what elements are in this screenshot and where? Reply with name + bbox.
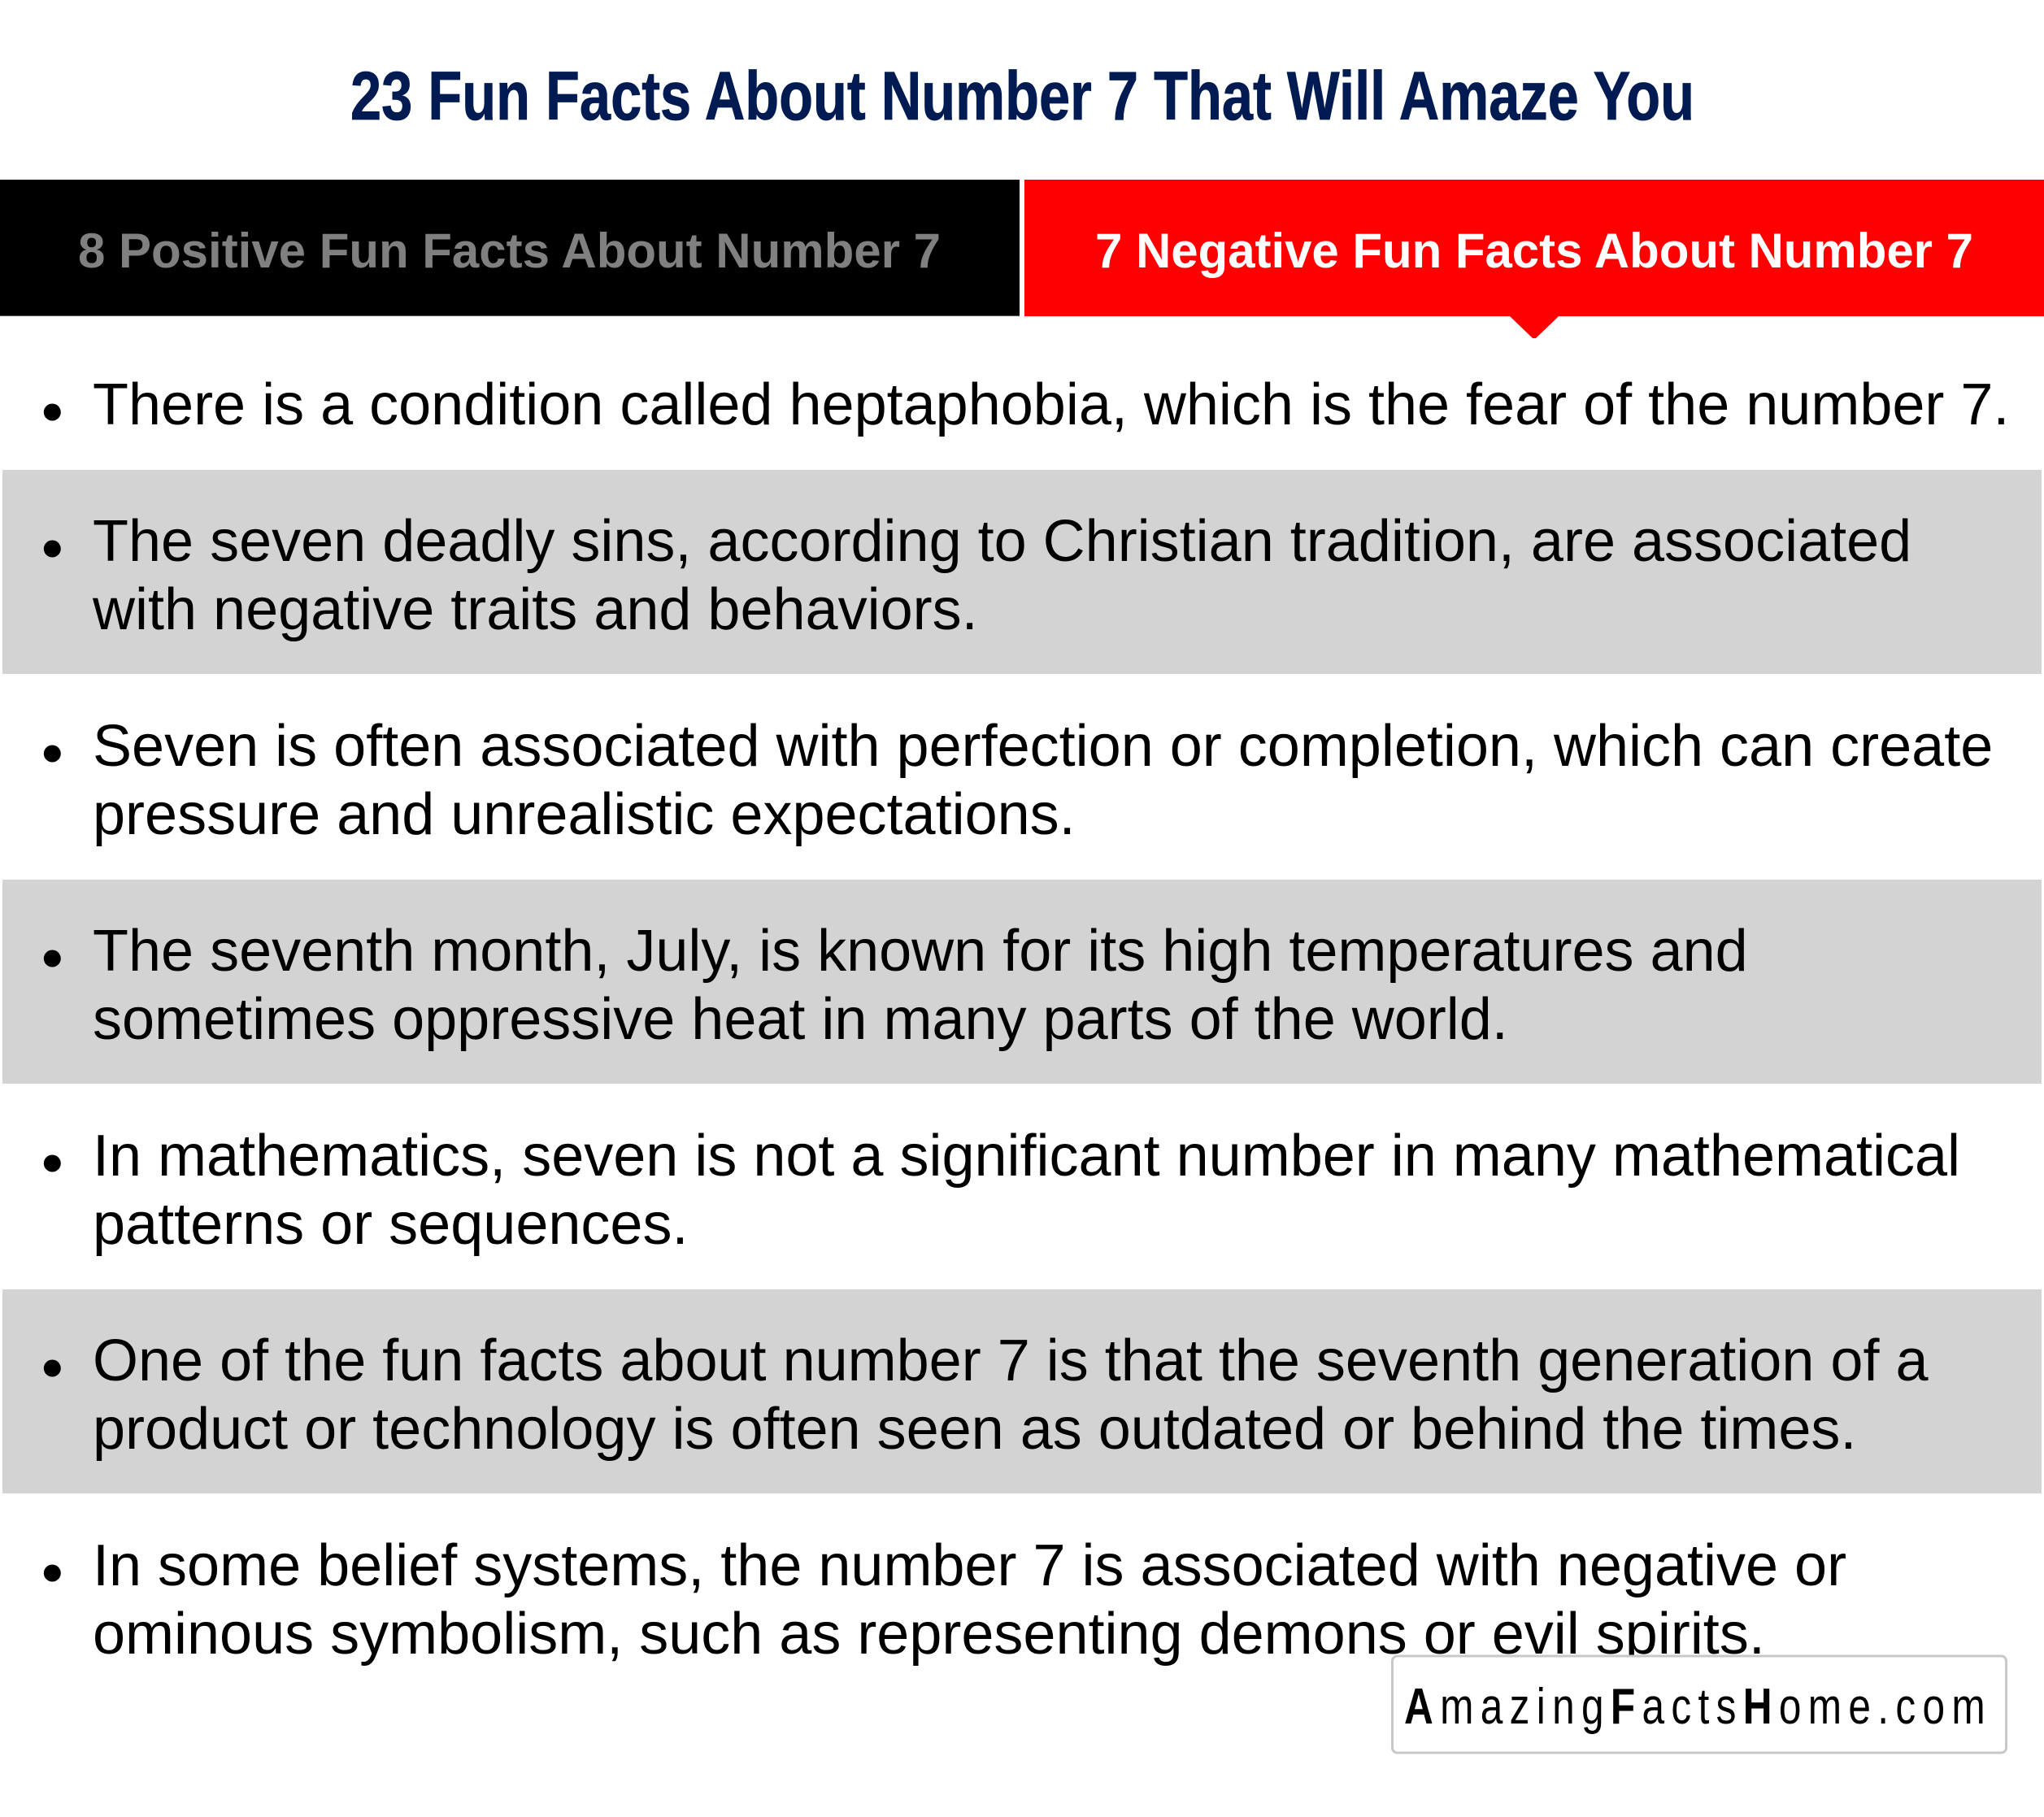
- fact 6: product or technology is often seen as outdated or behind the times.: [93, 1397, 1856, 1462]
- tab: positive facts: [0, 180, 1020, 316]
- fact 6: One of the fun facts about number 7 is that the seventh generation of a: [93, 1328, 1929, 1393]
- fact 4: [2, 880, 2042, 1084]
- fact 4: sometimes oppressive heat in many parts of the world.: [93, 987, 1508, 1052]
- fact 7: In some belief systems, the number 7 is associated with negative or: [93, 1533, 1846, 1598]
- tab: negative facts (active): [1024, 180, 2044, 338]
- fact 5: [44, 1124, 1960, 1257]
- tab: negative facts (active): 7 Negative Fun Facts About Number 7: [1095, 224, 1973, 278]
- watermark: AmazingFactsHome.com: AmazingFactsHome.com: [1404, 1678, 1992, 1734]
- fact 5: patterns or sequences.: [93, 1192, 688, 1257]
- fact 3: Seven is often associated with perfection or completion, which can create: [93, 714, 1993, 779]
- fact 2: [2, 470, 2042, 674]
- fact 4: The seventh month, July, is known for its high temperatures and: [93, 919, 1748, 984]
- fact 2: with negative traits and behaviors.: [92, 577, 978, 642]
- fact 1: There is a condition called heptaphobia, which is the fear of the number 7.: [93, 372, 2009, 437]
- fact 2: The seven deadly sins, according to Christian tradition, are associated: [93, 509, 1911, 574]
- watermark: AmazingFactsHome.com: [1392, 1656, 2007, 1754]
- fact 3: [44, 714, 1993, 847]
- fact 7: [44, 1533, 1846, 1667]
- title: 23 Fun Facts About Number 7 That Will Amaze You: [350, 58, 1694, 134]
- fact 7: ominous symbolism, such as representing demons or evil spirits.: [93, 1602, 1765, 1667]
- fact 3: pressure and unrealistic expectations.: [93, 782, 1076, 847]
- tab: positive facts: 8 Positive Fun Facts About Number 7: [78, 224, 941, 278]
- fact 6: [2, 1289, 2042, 1493]
- fact 5: In mathematics, seven is not a significant number in many mathematical: [93, 1124, 1960, 1189]
